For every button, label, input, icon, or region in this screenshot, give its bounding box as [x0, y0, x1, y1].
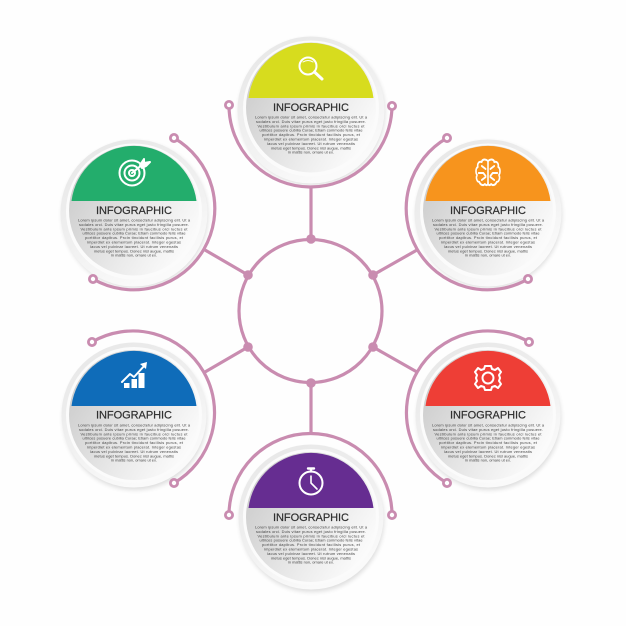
arc end right [388, 102, 396, 110]
body text [255, 524, 368, 565]
icon: growth chart [122, 362, 147, 388]
body text: imperdiet ex elementum placerat. Integer egestas [87, 240, 181, 244]
body text: imperdiet ex elementum placerat. Integer egestas [441, 444, 535, 450]
colour cap [426, 146, 550, 201]
connector: lower left [205, 347, 248, 372]
body text: ultrices posuere cubilia Curae; Etiam commodo felis vitae [260, 128, 362, 133]
panel: lower right gear [406, 331, 561, 490]
body text: in mattis non, ornare ut ex. [465, 253, 511, 258]
body text: sodales orci. Duis vitae purus eget justo fringilla posuere. [433, 427, 543, 432]
icon: gear [475, 366, 501, 390]
arc end bottom [170, 479, 178, 487]
body text: lacus vel pulvinar laoreet. Ut rutrum venenatis [444, 449, 532, 454]
panel: lower left chart [62, 331, 215, 490]
heading: INFOGRAPHIC [273, 102, 349, 114]
arc end top [170, 134, 178, 142]
connector: bottom [309, 383, 313, 432]
body text: metus eget tempus. Donec nisl augue, mattis [271, 555, 351, 560]
body text: lacus vel pulvinar laoreet. Ut rutrum venenatis [267, 141, 355, 146]
body text: in mattis non, ornare ut ex. [111, 253, 157, 258]
disc [60, 140, 208, 288]
body text: Vestibulum ante ipsum primis in faucibus orci luctus et [434, 431, 542, 436]
colour cap [248, 453, 374, 508]
body text: in mattis non, ornare ut ex. [465, 458, 511, 463]
arc [229, 434, 392, 515]
body text: porttitor dapibus. Proin tincidunt facilisis purus, et [85, 440, 184, 445]
heading: INFOGRAPHIC [450, 410, 526, 422]
body text: ultrices posuere cubilia Curae; Etiam commodo felis vitae [436, 436, 540, 441]
arc end top [88, 338, 96, 346]
icon: target [120, 159, 150, 186]
body text: in mattis non, ornare ut ex. [111, 458, 157, 463]
body text: Lorem ipsum dolor sit amet, consectetur adipiscing elit. Ut a [255, 114, 368, 120]
body text: metus eget tempus. Donec nisl augue, mattis [448, 248, 528, 253]
body text: metus eget tempus. Donec nisl augue, mattis [271, 145, 351, 150]
body text: Lorem ipsum dolor sit amet, consectetur adipiscing elit. Ut a [78, 218, 191, 222]
body text: ultrices posuere cubilia Curae; Etiam commodo felis vitae [260, 538, 362, 543]
colour cap [426, 351, 550, 406]
connector: top [309, 187, 313, 239]
arc [229, 105, 392, 187]
body text: sodales orci. Duis vitae purus eget justo fringilla posuere. [256, 119, 366, 124]
disc [238, 444, 384, 592]
body text: Vestibulum ante ipsum primis in faucibus orci luctus et [80, 431, 188, 436]
panel: upper right brain [406, 134, 562, 290]
body text [78, 422, 191, 463]
arc end right [388, 511, 396, 519]
body text: lacus vel pulvinar laoreet. Ut rutrum venenatis [444, 244, 532, 249]
icon: brain [476, 159, 500, 185]
arc end top [525, 338, 533, 346]
arc [406, 331, 529, 483]
arc end left [225, 511, 233, 519]
body text [432, 218, 545, 258]
body text: porttitor dapibus. Proin tincidunt facilisis purus, et [85, 235, 184, 240]
connector: lower right [373, 347, 417, 372]
arc [406, 138, 528, 290]
arc end bottom [89, 275, 97, 283]
body text: metus eget tempus. Donec nisl augue, mattis [94, 248, 174, 253]
heading: INFOGRAPHIC [96, 410, 172, 422]
colour cap [72, 146, 196, 201]
body text: Lorem ipsum dolor sit amet, consectetur adipiscing elit. Ut a [432, 422, 545, 428]
body text: imperdiet ex elementum placerat. Integer egestas [264, 136, 358, 142]
body text: ultrices posuere cubilia Curae; Etiam commodo felis vitae [82, 231, 186, 236]
panel: upper left target [60, 134, 215, 290]
body text: imperdiet ex elementum placerat. Integer egestas [87, 444, 181, 450]
hub ring [239, 240, 382, 382]
disc [414, 140, 562, 288]
connector: upper left [205, 250, 248, 275]
disc [416, 342, 561, 490]
body text: porttitor dapibus. Proin tincidunt facilisis purus, et [439, 440, 538, 445]
arc [92, 331, 215, 483]
panel: bottom stopwatch [225, 434, 396, 592]
body text: lacus vel pulvinar laoreet. Ut rutrum venenatis [90, 244, 178, 249]
body text: Lorem ipsum dolor sit amet, consectetur adipiscing elit. Ut a [432, 218, 545, 222]
heading: INFOGRAPHIC [450, 205, 526, 217]
body text: metus eget tempus. Donec nisl augue, mattis [448, 453, 528, 458]
body text [255, 114, 368, 155]
body text: imperdiet ex elementum placerat. Integer egestas [441, 240, 535, 244]
body text: Vestibulum ante ipsum primis in faucibus orci luctus et [258, 123, 365, 128]
body text: imperdiet ex elementum placerat. Integer egestas [264, 546, 358, 552]
body text: porttitor dapibus. Proin tincidunt facilisis purus, et [262, 132, 361, 137]
body text: sodales orci. Duis vitae purus eget justo fringilla posuere. [256, 529, 366, 534]
body text: Lorem ipsum dolor sit amet, consectetur adipiscing elit. Ut a [78, 422, 191, 428]
central hub [205, 187, 417, 432]
body text: lacus vel pulvinar laoreet. Ut rutrum venenatis [267, 551, 355, 556]
heading: INFOGRAPHIC [273, 512, 349, 524]
body text [432, 422, 545, 463]
body text: porttitor dapibus. Proin tincidunt facilisis purus, et [439, 235, 538, 240]
body text: Vestibulum ante ipsum primis in faucibus orci luctus et [434, 226, 542, 231]
body text: sodales orci. Duis vitae purus eget justo fringilla posuere. [79, 427, 189, 432]
body text: sodales orci. Duis vitae purus eget justo fringilla posuere. [433, 222, 543, 227]
connector: upper right [373, 250, 417, 275]
body text: lacus vel pulvinar laoreet. Ut rutrum venenatis [90, 449, 178, 454]
body text: metus eget tempus. Donec nisl augue, mattis [94, 453, 174, 458]
hub nodes [243, 234, 378, 388]
body text: in mattis non, ornare ut ex. [288, 150, 334, 155]
arc end bottom [443, 479, 451, 487]
icon: magnifier [300, 58, 322, 79]
body text: Lorem ipsum dolor sit amet, consectetur adipiscing elit. Ut a [255, 524, 368, 530]
body text: sodales orci. Duis vitae purus eget justo fringilla posuere. [79, 222, 189, 227]
arc end top [443, 134, 451, 142]
colour cap [72, 351, 196, 406]
heading: INFOGRAPHIC [96, 205, 172, 217]
icon: stopwatch [300, 468, 322, 494]
colour cap [248, 43, 374, 98]
body text: Vestibulum ante ipsum primis in faucibus orci luctus et [258, 533, 365, 538]
disc [62, 342, 207, 490]
arc [93, 138, 215, 290]
body text: Vestibulum ante ipsum primis in faucibus orci luctus et [80, 226, 188, 231]
body text: ultrices posuere cubilia Curae; Etiam commodo felis vitae [436, 231, 540, 236]
disc [238, 36, 385, 185]
body text: porttitor dapibus. Proin tincidunt facilisis purus, et [262, 542, 361, 547]
body text: in mattis non, ornare ut ex. [288, 560, 334, 565]
arc end left [225, 101, 233, 109]
body text [78, 218, 191, 258]
body text: ultrices posuere cubilia Curae; Etiam commodo felis vitae [82, 436, 186, 441]
panel: top search [225, 36, 396, 187]
arc end bottom [524, 275, 532, 283]
